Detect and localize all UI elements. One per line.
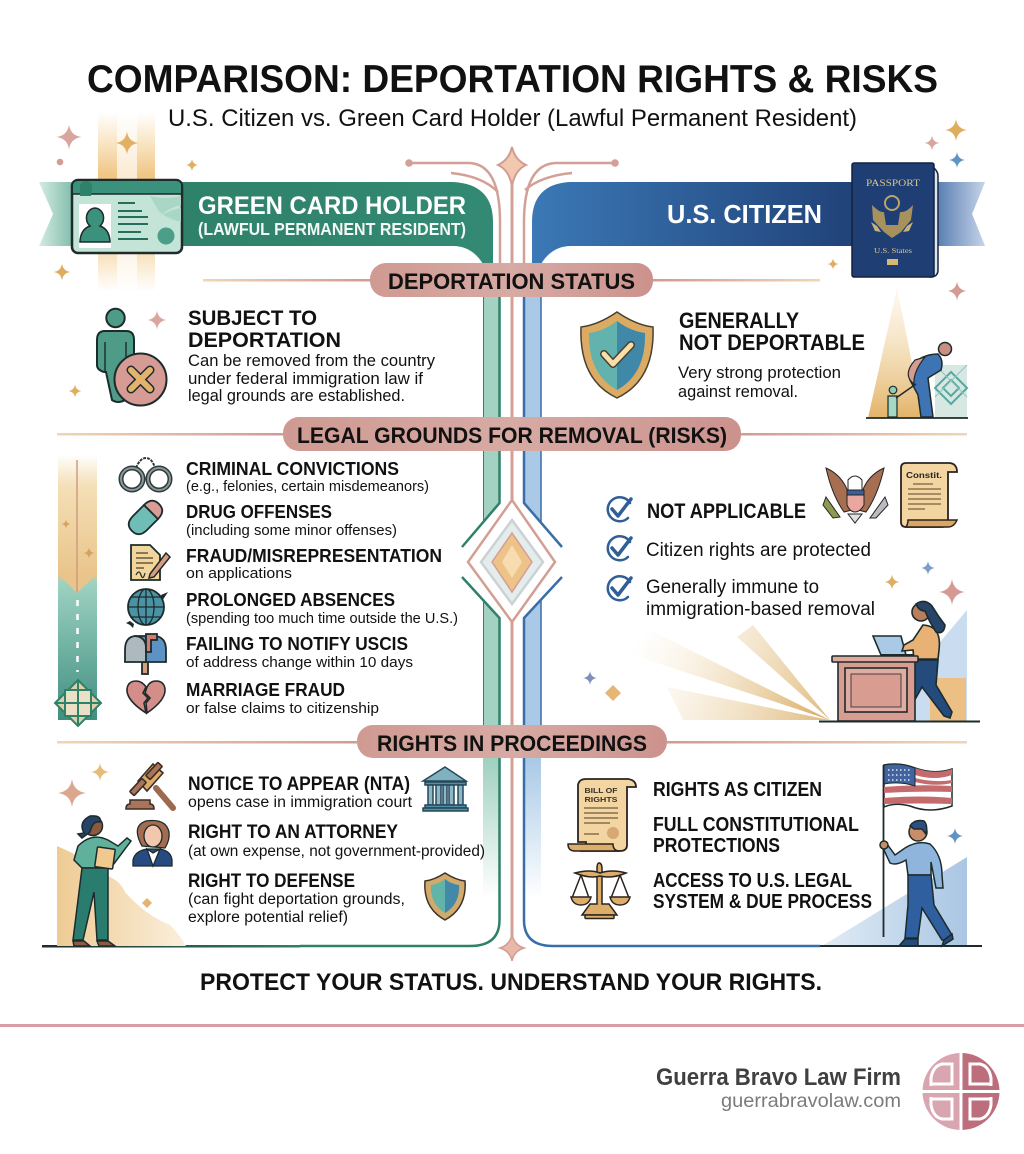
text: rights in proceedings, green card holder: explore potential relief) bbox=[188, 909, 348, 926]
panel: citizen rights in proceedings bbox=[568, 764, 982, 946]
text: subject to deportation: under federal immigration law if bbox=[188, 370, 423, 388]
text: generally not deportable: GENERALLY bbox=[679, 308, 799, 333]
blue column frame bbox=[524, 264, 820, 946]
item: drug offenses: (including some minor offenses) bbox=[186, 523, 397, 539]
icon: shield with check bbox=[581, 312, 653, 398]
icon: center diamond emblem bbox=[468, 500, 555, 622]
icon: constitution scroll: Constit. bbox=[906, 470, 942, 480]
icon: passport: U.S. States bbox=[874, 246, 912, 255]
ground line bbox=[820, 945, 982, 947]
icon: signed document with pen bbox=[131, 545, 170, 580]
item: marriage fraud bbox=[127, 679, 379, 717]
text: subject to deportation bbox=[188, 307, 436, 405]
subtitle: U.S. Citizen vs. Green Card Holder (Lawful Permanent Resident) bbox=[168, 105, 857, 132]
icon: shield bbox=[425, 873, 465, 920]
list: citizen protections bbox=[608, 497, 875, 620]
text: generally not deportable: NOT DEPORTABLE bbox=[679, 330, 865, 355]
decorative sparkles: top right bbox=[828, 119, 967, 300]
item: prolonged absences: (spending too much time outside the U.S.) bbox=[186, 611, 458, 627]
footer: firm name: Guerra Bravo Law Firm bbox=[656, 1064, 901, 1091]
icon: scales of justice bbox=[571, 863, 630, 918]
item: marriage fraud: or false claims to citizenship bbox=[186, 701, 379, 717]
section divider: legal grounds bbox=[57, 417, 967, 451]
item: criminal convictions: (e.g., felonies, certain misdemeanors) bbox=[186, 479, 429, 495]
text: subject to deportation: Can be removed from the country bbox=[188, 352, 436, 370]
icon: bill of rights scroll bbox=[568, 779, 636, 851]
section divider: rights in proceedings: RIGHTS IN PROCEEDINGS bbox=[377, 731, 647, 756]
text: subject to deportation: legal grounds are established. bbox=[188, 387, 405, 405]
list: legal grounds for removal bbox=[121, 458, 458, 717]
footer: firm name bbox=[656, 1064, 901, 1112]
text: rights in proceedings, green card holder: NOTICE TO APPEAR (NTA) bbox=[188, 774, 410, 795]
panel: citizen deportation status bbox=[581, 288, 968, 418]
list: citizen protections: NOT APPLICABLE bbox=[647, 500, 806, 523]
section divider: deportation status: DEPORTATION STATUS bbox=[388, 269, 635, 294]
gold background wave bbox=[57, 846, 186, 946]
text: rights in proceedings, green card holder: RIGHT TO AN ATTORNEY bbox=[188, 822, 398, 843]
call to action: PROTECT YOUR STATUS. UNDERSTAND YOUR RIGHTS. bbox=[200, 969, 822, 996]
panel: green card rights in proceedings bbox=[57, 762, 485, 946]
text: rights in proceedings, green card holder: (can fight deportation grounds, bbox=[188, 891, 405, 908]
icon: constitution scroll bbox=[901, 463, 957, 527]
illustration: man holding U.S. flag bbox=[880, 764, 953, 946]
text: rights as citizen: RIGHTS AS CITIZEN bbox=[653, 779, 822, 801]
icon: center bottom star bbox=[500, 934, 524, 961]
footer: firm name: guerrabravolaw.com bbox=[721, 1090, 901, 1112]
icon: handcuffs bbox=[121, 458, 170, 490]
text: subject to deportation: SUBJECT TO bbox=[188, 307, 317, 330]
section divider: deportation status bbox=[203, 263, 820, 297]
item: marriage fraud: MARRIAGE FRAUD bbox=[186, 679, 345, 700]
illustration: woman with clipboard bbox=[73, 816, 131, 946]
banner text: (LAWFUL PERMANENT RESIDENT) bbox=[198, 219, 466, 239]
banner: green card holder bbox=[39, 180, 493, 264]
item: criminal convictions bbox=[121, 458, 429, 495]
banner: U.S. citizen bbox=[532, 163, 985, 277]
text: rights in proceedings, green card holder bbox=[188, 774, 485, 926]
decorative sparkles: rights left bbox=[58, 763, 152, 908]
item: failing to notify USCIS bbox=[125, 633, 413, 674]
illustration: woman at desk with laptop bbox=[819, 601, 980, 722]
item: criminal convictions: CRIMINAL CONVICTIONS bbox=[186, 458, 399, 479]
decorative sparkles: citizen panel bbox=[583, 561, 965, 701]
section divider: legal grounds: LEGAL GROUNDS FOR REMOVAL (RISKS) bbox=[297, 423, 727, 448]
section divider: rights in proceedings bbox=[57, 725, 967, 758]
icon: passport: PASSPORT bbox=[866, 179, 920, 189]
illustration: adult helping child in light bbox=[866, 288, 968, 418]
green column frame bbox=[42, 264, 500, 948]
text: generally not deportable: Very strong protection bbox=[678, 363, 841, 382]
panel: citizen legal grounds bbox=[583, 463, 980, 722]
icon: mailbox bbox=[125, 634, 166, 674]
icon: broken heart bbox=[127, 681, 165, 713]
item: failing to notify USCIS: of address change within 10 days bbox=[186, 655, 413, 671]
list: citizen protections: Citizen rights are protected bbox=[646, 540, 871, 561]
banner text: U.S. CITIZEN bbox=[667, 199, 822, 229]
icon: globe bbox=[126, 589, 168, 628]
icon: courthouse bbox=[423, 767, 468, 811]
footer divider bbox=[0, 1024, 1024, 1027]
text: subject to deportation: DEPORTATION bbox=[188, 329, 341, 352]
icon: bill of rights scroll: BILL OF bbox=[584, 786, 618, 795]
icon: attorney bbox=[133, 820, 172, 866]
list: citizen protections: Generally immune to bbox=[646, 577, 819, 598]
icon: capsule bbox=[129, 501, 162, 534]
icon: bill of rights scroll: RIGHTS bbox=[584, 795, 618, 804]
icon: green card bbox=[72, 180, 182, 253]
item: prolonged absences bbox=[126, 589, 458, 628]
icon: sparkle bbox=[947, 828, 963, 844]
item: failing to notify USCIS: FAILING TO NOTIFY USCIS bbox=[186, 633, 408, 654]
text: rights in proceedings, green card holder: opens case in immigration court bbox=[188, 794, 413, 811]
gold light rays bbox=[627, 625, 830, 720]
text: generally not deportable: against removal. bbox=[678, 382, 798, 401]
item: prolonged absences: PROLONGED ABSENCES bbox=[186, 589, 395, 610]
text: rights as citizen: FULL CONSTITUTIONAL bbox=[653, 814, 859, 836]
icon: gavel bbox=[126, 762, 173, 809]
item: drug offenses bbox=[129, 501, 397, 539]
panel: green card deportation status bbox=[97, 307, 436, 406]
decorative side strip with gem bbox=[55, 455, 101, 726]
item: fraud/misrepresentation: FRAUD/MISREPRESENTATION bbox=[186, 545, 442, 566]
text: rights as citizen: ACCESS TO U.S. LEGAL bbox=[653, 870, 852, 892]
banner text: GREEN CARD HOLDER bbox=[198, 192, 466, 220]
text: generally not deportable bbox=[678, 308, 865, 401]
item: drug offenses: DRUG OFFENSES bbox=[186, 501, 332, 522]
gold light beams behind card bbox=[98, 112, 155, 292]
icon: passport bbox=[852, 163, 938, 277]
text: rights as citizen: PROTECTIONS bbox=[653, 835, 780, 857]
list: citizen protections: immigration-based removal bbox=[646, 599, 875, 620]
item: fraud/misrepresentation: on applications bbox=[186, 566, 292, 582]
text: rights as citizen: SYSTEM & DUE PROCESS bbox=[653, 891, 872, 913]
central ornament lines bbox=[405, 159, 619, 940]
blue background slope bbox=[822, 857, 967, 946]
title: COMPARISON: DEPORTATION RIGHTS & RISKS bbox=[87, 58, 938, 101]
item: fraud/misrepresentation bbox=[131, 545, 442, 582]
icon: eagle seal bbox=[823, 468, 888, 523]
decorative sparkles: top left bbox=[54, 124, 198, 398]
icon: firm logo bbox=[920, 1050, 1002, 1133]
text: rights in proceedings, green card holder: RIGHT TO DEFENSE bbox=[188, 871, 355, 892]
banner text bbox=[198, 192, 466, 239]
icon: person with X bbox=[97, 309, 166, 406]
text: rights in proceedings, green card holder: (at own expense, not government-provided) bbox=[188, 843, 485, 860]
text: rights as citizen bbox=[653, 779, 872, 913]
icon: center top star bbox=[498, 147, 526, 186]
